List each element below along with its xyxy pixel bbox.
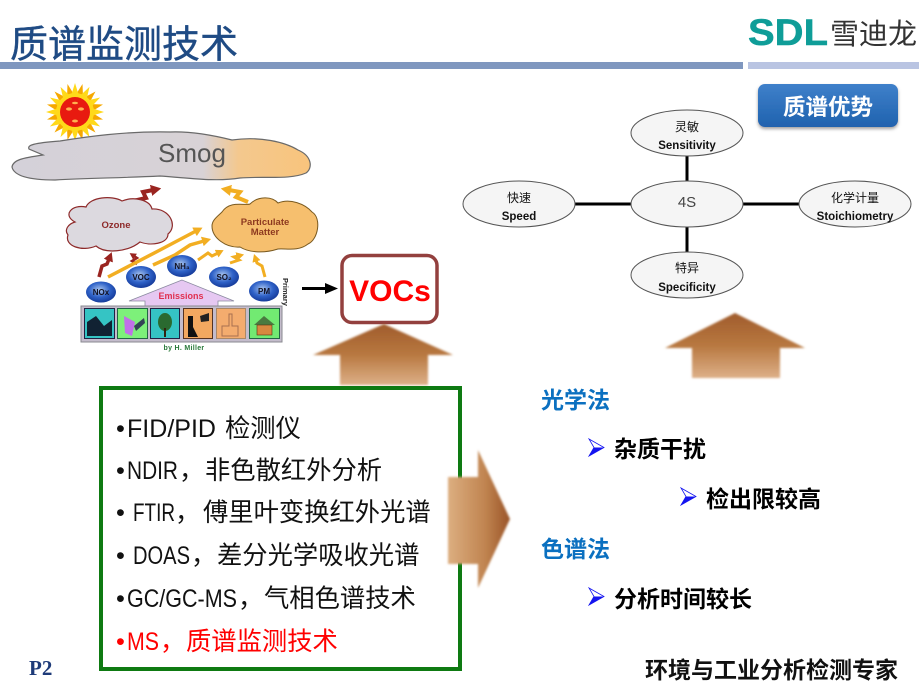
item: GC/GC-MS: ， xyxy=(238,585,263,613)
item: FTIR: 傅里叶变换红外光谱 xyxy=(203,499,431,527)
node: speed: 快速 xyxy=(507,191,531,205)
item: DOAS: DOAS xyxy=(133,542,190,570)
item: MS: • xyxy=(116,628,125,656)
item: FID/PID: • xyxy=(116,415,125,443)
emissions house xyxy=(129,280,234,306)
heading: optical: 光学法 xyxy=(541,387,610,413)
node: 4S: 4S xyxy=(678,194,696,211)
logo: SDL: SDL xyxy=(748,12,828,53)
emission source balls: NOx xyxy=(93,288,110,297)
emission source balls: VOC xyxy=(132,273,150,282)
node: specificity xyxy=(631,252,743,298)
item: FTIR: • xyxy=(116,499,125,527)
badge: mass spec advantages xyxy=(758,84,898,127)
item: NDIR: NDIR xyxy=(127,457,178,485)
drawbacks list xyxy=(541,387,821,612)
item: MS: 质谱监测技术 xyxy=(186,628,338,656)
emission arrows xyxy=(99,231,265,277)
smog diagram xyxy=(12,76,318,352)
arrow: smog to VOCs xyxy=(302,283,338,294)
item: GC/GC-MS: 气相色谱技术 xyxy=(264,585,416,613)
item: MS: MS xyxy=(127,628,159,656)
node: specificity: Specificity xyxy=(658,282,716,294)
emissions house: Emissions xyxy=(158,291,204,301)
header bar xyxy=(0,62,919,69)
particulate matter cloud: Matter xyxy=(251,227,280,238)
node: speed xyxy=(463,181,575,227)
item: impurity interference: 杂质干扰 xyxy=(614,436,706,462)
VOCs box xyxy=(342,256,437,322)
logo: SDL: 雪迪龙 xyxy=(830,18,917,51)
item: FID/PID: 检测仪 xyxy=(225,415,301,443)
panel: monitoring techniques xyxy=(101,388,460,669)
node: specificity: 特异 xyxy=(675,260,699,275)
item: GC/GC-MS: • xyxy=(116,585,125,613)
heading: chromatography: 色谱法 xyxy=(541,536,610,562)
emission source balls: NH₃ xyxy=(174,262,190,271)
item: NDIR: • xyxy=(116,457,125,485)
item: NDIR: ， xyxy=(179,457,204,485)
item: NDIR: 非色散红外分析 xyxy=(205,457,382,485)
arrow: ozone to smog xyxy=(133,190,153,201)
node: stoichiometry xyxy=(799,181,911,227)
4S diagram xyxy=(463,110,911,298)
item: higher detection limit: 检出限较高 xyxy=(706,486,821,512)
label: primary: Primary xyxy=(281,278,290,307)
item: DOAS: 差分光学吸收光谱 xyxy=(217,542,419,570)
item: FID/PID: FID/PID xyxy=(127,415,216,443)
node: speed: Speed xyxy=(502,211,536,223)
item: FTIR: ， xyxy=(175,499,200,527)
item: DOAS: ， xyxy=(191,542,216,570)
item: MS: ， xyxy=(160,628,185,656)
smog cloud: Smog xyxy=(158,138,226,168)
ozone cloud: Ozone xyxy=(101,220,131,231)
node: stoichiometry: 化学计量 xyxy=(831,190,879,205)
emission source balls: PM xyxy=(258,287,270,296)
badge: mass spec advantages: 质谱优势 xyxy=(783,95,873,120)
emission source balls xyxy=(86,255,279,302)
item: DOAS: • xyxy=(116,542,125,570)
arrow: particulate to smog xyxy=(229,190,248,202)
arrow: up to 4S xyxy=(665,313,805,378)
icon: sun xyxy=(39,76,111,148)
page number: P2 xyxy=(29,656,52,680)
item: GC/GC-MS: GC/GC-MS xyxy=(127,585,237,613)
node: stoichiometry: Stoichiometry xyxy=(817,211,894,223)
logo: SDL xyxy=(748,12,917,53)
title: 质谱监测技术 xyxy=(10,24,238,66)
arrow: up to VOCs xyxy=(313,324,453,385)
VOCs box: VOCs xyxy=(349,275,431,308)
emission source tiles xyxy=(81,306,282,342)
item: FTIR: FTIR xyxy=(133,499,175,527)
smog cloud xyxy=(12,132,310,180)
node: sensitivity: 灵敏 xyxy=(675,119,699,134)
particulate matter cloud: Particulate xyxy=(241,217,289,228)
ozone cloud xyxy=(66,198,172,251)
node: sensitivity: Sensitivity xyxy=(658,140,716,152)
footer slogan: 环境与工业分析检测专家 xyxy=(645,657,898,683)
arrow: to drawbacks xyxy=(448,450,510,588)
item: longer analysis time: 分析时间较长 xyxy=(614,586,752,612)
node: 4S xyxy=(631,181,743,227)
emission source balls: SO₂ xyxy=(216,273,232,282)
credit: by H. Miller xyxy=(164,345,204,352)
node: sensitivity xyxy=(631,110,743,156)
particulate matter cloud xyxy=(212,198,318,252)
